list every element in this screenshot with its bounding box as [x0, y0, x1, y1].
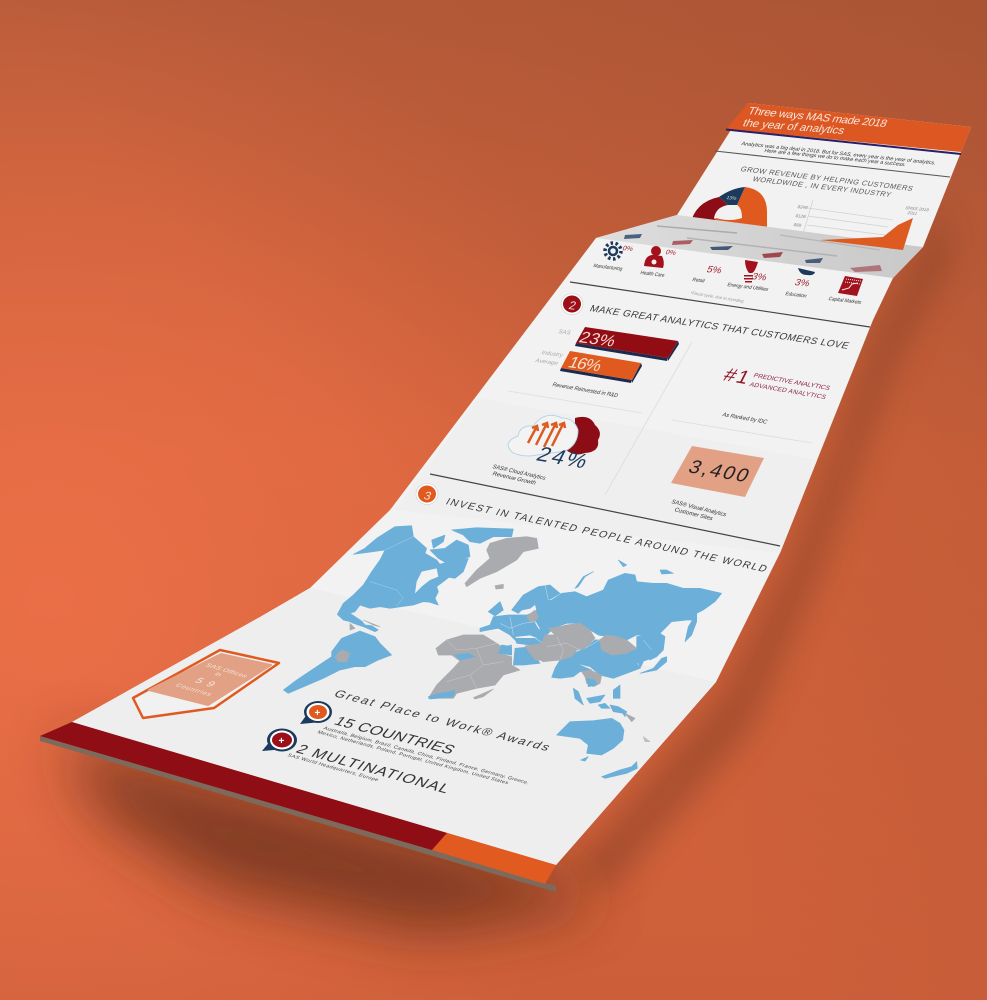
industry labels: Retail — [691, 277, 705, 284]
callout: customer sites: SAS® Visual Analytics — [670, 499, 728, 518]
paper sheet — [72, 103, 971, 865]
callout: offices ribbon: Countries — [173, 683, 214, 697]
callout: customer sites — [670, 446, 764, 522]
footnote: *Fiscal cycle, due to rounding — [690, 290, 745, 304]
icon: pin orange — [300, 701, 332, 724]
icon: capital markets — [838, 276, 863, 296]
intro text: Here are a few things we do to make each year a success. — [763, 148, 907, 168]
icon: pin red: + — [278, 736, 284, 747]
fold band — [596, 215, 923, 278]
bar: industry — [561, 351, 641, 380]
badge 3 — [416, 484, 438, 504]
intro text: Analytics was a big deal in 2018. But for SAS, every year is the year of analytics. — [740, 141, 937, 166]
callout: customer sites: 3,400 — [685, 457, 753, 486]
callout: number one: As Ranked by IDC — [721, 412, 769, 426]
callout: number one — [720, 365, 832, 426]
industry labels: Health Care — [639, 270, 665, 279]
heading 3: INVEST IN TALENTED PEOPLE AROUND THE WORLD — [443, 497, 769, 575]
percentages: 5% — [705, 265, 724, 276]
area chart labels — [793, 204, 930, 228]
callout: cloud revenue growth: Revenue Growth — [491, 471, 537, 486]
donut chart — [690, 187, 767, 232]
bar chart: revenue reinvested: SAS — [557, 329, 572, 336]
bar chart: revenue reinvested: Average — [534, 358, 559, 367]
bar chart: revenue reinvested — [534, 327, 679, 399]
bar: SAS — [576, 327, 678, 358]
area chart labels: SNSS 2018 — [905, 205, 930, 212]
percentages: 0% — [664, 249, 677, 257]
callout: offices ribbon: SAS Offices — [203, 663, 249, 679]
map: Eurasia — [480, 560, 722, 687]
percentages: 3% — [750, 272, 769, 283]
lower fold shading — [72, 588, 716, 865]
percentages: 3% — [793, 278, 812, 289]
percentages: 0% — [621, 245, 634, 253]
callout: number one: #1 — [720, 365, 753, 389]
panel: title header — [726, 103, 971, 154]
icon: bulb — [744, 260, 758, 282]
area chart labels: 2011 — [907, 210, 919, 216]
rule 3 — [430, 474, 780, 546]
heading: grow revenue: WORLDWIDE , IN EVERY INDUSTRY — [751, 175, 893, 199]
area chart fill — [820, 218, 913, 250]
bar chart: revenue reinvested: Industry — [540, 350, 564, 359]
footer band: red — [40, 722, 447, 850]
industry labels — [592, 263, 863, 306]
area chart labels: $12B — [795, 213, 807, 219]
paper thickness edge — [40, 736, 556, 892]
industry labels: Manufacturing — [592, 263, 623, 272]
callout: offices ribbon: in — [212, 672, 223, 678]
awards: 15 countries: 15 COUNTRIES — [331, 714, 458, 757]
world map — [283, 526, 722, 778]
icon: education cap — [798, 268, 815, 275]
badge 2: 2 — [567, 299, 578, 313]
icon: arrows — [528, 423, 565, 447]
map: South America and Africa — [283, 631, 520, 699]
callout: offices ribbon: 59 — [192, 676, 218, 689]
bar caption: Revenue Reinvested in R&D — [551, 382, 619, 399]
callout: number one: ADVANCED ANALYTICS — [748, 382, 828, 401]
awards: 2 multinational: 2 MULTINATIONAL — [293, 742, 454, 796]
panel: industries — [592, 243, 863, 306]
rule 2 — [570, 282, 870, 327]
title line 1: Three ways MAS made 2018 — [746, 106, 889, 130]
donut label: 13% — [725, 195, 738, 202]
map: North America and Greenland — [337, 526, 538, 632]
icon: red cloud — [566, 417, 600, 454]
icon: outline cloud — [508, 415, 578, 456]
map: Southeast Asia and Oceania — [557, 678, 650, 778]
badge 2 — [561, 294, 583, 314]
area chart axes — [802, 200, 893, 237]
middle fold shading — [780, 460, 818, 552]
callout: offices ribbon — [133, 650, 279, 718]
area chart labels: $24B — [797, 204, 809, 210]
title line 2: the year of analytics — [741, 118, 847, 137]
awards: 2 multinational: SAS World Headquarters, Europe — [286, 753, 380, 783]
icon: pin red — [262, 728, 297, 752]
area chart labels: $6B — [793, 222, 803, 228]
awards: 15 countries: Australia, Belgium, Brazil, Canada, China, Finland, France, Germany, Greece, — [322, 726, 530, 786]
bar chart: revenue reinvested: 16% — [565, 353, 605, 375]
callout: cloud revenue growth: SAS® Cloud Analytics — [491, 464, 547, 482]
awards: 15 countries: Mexico, Netherlands, Poland, Portugal, United Kingdom, United States — [316, 730, 510, 786]
callout: number one: PREDICTIVE ANALYTICS — [752, 373, 832, 392]
industry labels: Education — [784, 291, 807, 299]
icon: pin orange: + — [314, 708, 320, 719]
callout: customer sites: Customer Sites — [673, 507, 714, 522]
industry labels: Energy and Utilities — [726, 282, 769, 293]
heading 2: MAKE GREAT ANALYTICS THAT CUSTOMERS LOVE — [588, 304, 851, 352]
industry labels: Capital Markets — [827, 296, 863, 306]
heading: grow revenue: GROW REVENUE BY HELPING CUSTOMERS — [739, 165, 915, 193]
percentages — [621, 245, 812, 289]
icon: health care — [644, 246, 664, 268]
bar chart: revenue reinvested: 23% — [576, 328, 619, 350]
awards heading: Great Place to Work® Awards — [331, 688, 553, 753]
dividers — [508, 342, 812, 495]
footer band: orange — [432, 833, 556, 884]
callout: cloud revenue growth: 24% — [533, 442, 592, 473]
badge 3: 3 — [422, 489, 434, 503]
callout: cloud revenue growth — [491, 415, 600, 486]
icon: gear — [605, 243, 621, 259]
